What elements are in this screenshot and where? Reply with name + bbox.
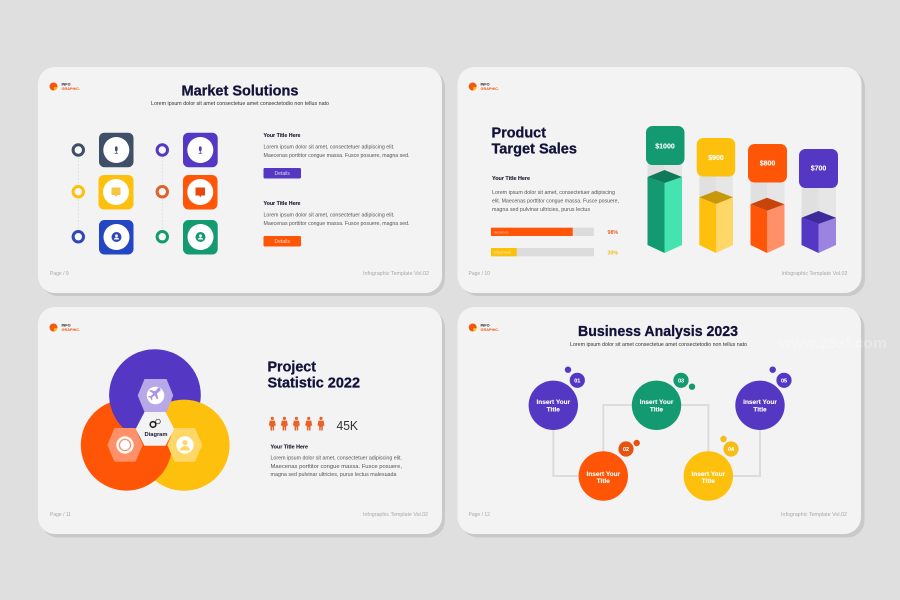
node 03: Insert Your <box>640 399 674 406</box>
subtitle: Lorem ipsum dolor sit amet consectetue amet consectetodio non tellus nato <box>570 342 747 348</box>
bar: 700: $700 <box>811 166 826 173</box>
node 03 <box>632 373 695 430</box>
hexagon: user icon <box>167 428 202 462</box>
footer: Page / 10 <box>468 271 490 277</box>
icon tile: green user <box>183 220 218 254</box>
node 02: 02 <box>623 447 629 453</box>
logo: GRAPHIC. <box>480 328 499 332</box>
bar: 700 <box>799 149 838 253</box>
node 02 <box>579 440 640 501</box>
logo <box>50 324 80 332</box>
icon tile: yellow message <box>98 175 134 210</box>
heading: Product <box>492 124 546 141</box>
people icons <box>269 417 324 430</box>
panel: market solutions <box>38 67 445 296</box>
icon tile: purple microphone <box>183 133 218 167</box>
node 02: Title <box>597 478 610 485</box>
node 04 <box>684 436 739 501</box>
node 03: 03 <box>678 378 684 384</box>
footer: Infographic Template Vol.02 <box>781 512 847 518</box>
text block one <box>264 133 410 159</box>
bar: 1000 <box>646 126 684 253</box>
button: details orange: Details <box>275 239 290 245</box>
footer: Page / 11 <box>50 512 71 518</box>
footer <box>50 512 428 518</box>
button: details purple <box>264 168 301 178</box>
logo: INFO <box>480 82 490 86</box>
logo: INFO <box>480 324 490 328</box>
logo <box>469 324 499 332</box>
heading: Market Solutions <box>182 82 298 100</box>
panel: product target sales <box>458 67 865 296</box>
hexagon: diagram center <box>136 412 174 446</box>
node 05: Insert Your <box>743 399 777 406</box>
text block: magna sed pulvinar ultricies, purus lectus malesuada <box>270 472 397 478</box>
button: details orange <box>264 236 301 246</box>
footer <box>50 271 429 277</box>
hexagon: chat icon <box>107 428 143 462</box>
heading <box>268 359 360 392</box>
text block one: Your Title Here <box>264 133 300 139</box>
logo: GRAPHIC. <box>62 87 80 91</box>
text block one: Maecenas porttitor congue massa. Fusce posuere, magna sed. <box>264 153 410 159</box>
text block two: Lorem ipsum dolor sit amet, consectetuer adipiscing elit. <box>264 213 394 219</box>
footer: Page / 12 <box>468 512 490 518</box>
footer: Infographic Template Vol.02 <box>363 512 428 518</box>
footer: Infographic Template Vol.02 <box>363 271 429 277</box>
node 05 <box>735 366 792 430</box>
subtitle: Lorem ipsum dolor sit amet consectetue amet consectetodio non tellus nato <box>151 101 329 107</box>
bar: 900 <box>697 138 735 253</box>
logo: INFO <box>62 82 71 86</box>
heading: Project <box>268 359 316 376</box>
icon tile: slate microphone <box>99 133 134 167</box>
node 05: 05 <box>781 378 787 384</box>
node 04: Title <box>702 478 715 485</box>
bar: 900: $900 <box>708 155 724 162</box>
icon tile: blue user <box>99 220 134 254</box>
text block two: Maecenas porttitor congue massa. Fusce posuere, magna sed. <box>264 221 410 227</box>
text block one: Lorem ipsum dolor sit amet, consectetuer adipiscing elit. <box>264 145 394 151</box>
bar: 800 <box>748 144 787 253</box>
node 05: Title <box>753 406 767 413</box>
connector lines <box>553 405 760 476</box>
node 01: Title <box>547 406 560 413</box>
timeline rings <box>73 145 168 242</box>
logo: INFO <box>62 324 71 328</box>
text block: Your Title Here <box>492 176 530 182</box>
node 01: 01 <box>574 378 580 384</box>
footer <box>468 271 848 277</box>
venn diagram <box>81 349 230 491</box>
text block: Lorem ipsum dolor sit amet, consectetuer adipiscing <box>492 190 615 196</box>
hexagon: diagram center: Diagram <box>144 432 168 438</box>
node 04: Insert Your <box>691 471 726 478</box>
logo <box>50 82 80 91</box>
panel: project statistic <box>38 307 445 538</box>
footer: Infographic Template Vol.02 <box>782 271 848 277</box>
watermark: www.25xl.com <box>778 335 887 352</box>
hexagon: plane icon <box>138 379 173 412</box>
heading: Business Analysis 2023 <box>578 323 738 340</box>
logo <box>469 82 499 91</box>
node 03: Title <box>650 406 664 413</box>
text block <box>270 445 402 478</box>
logo: GRAPHIC. <box>480 87 499 91</box>
heading: Target Sales <box>492 140 577 157</box>
text block <box>492 176 619 213</box>
progress bar: incomes: 98% <box>608 230 618 236</box>
progress bar: incomes: Incomes <box>494 230 508 234</box>
heading <box>492 124 577 157</box>
progress bar: expenses <box>491 248 618 256</box>
stat: 45K: 45K <box>336 419 359 433</box>
footer <box>468 512 847 518</box>
progress bar: expenses: Expenses <box>494 251 511 255</box>
footer: Page / 9 <box>50 271 69 277</box>
bar: 800: $800 <box>760 161 775 168</box>
bar: 1000: $1000 <box>655 144 675 150</box>
text block: elit. Maecenas porttitor congue massa. Fusce posuere, <box>492 198 619 204</box>
text block two <box>264 201 410 227</box>
icon tile: orange presentation <box>183 175 218 210</box>
panel: business analysis <box>458 307 864 538</box>
node 01: Insert Your <box>536 399 571 406</box>
text block: magna sed pulvinar ultricies, purus lectus <box>492 207 591 213</box>
heading: Statistic 2022 <box>268 375 360 392</box>
text block: Lorem ipsum dolor sit amet, consectetuer adipiscing elit. <box>270 456 402 462</box>
progress bar: expenses: 30% <box>608 250 618 256</box>
text block: Your Title Here <box>270 445 308 451</box>
node 02: Insert Your <box>586 471 621 478</box>
logo: GRAPHIC. <box>62 328 80 332</box>
node 04: 04 <box>728 447 735 453</box>
node 01 <box>529 366 585 430</box>
text block: Maecenas porttitor congue massa. Fusce posuere, <box>270 464 402 470</box>
progress bar: incomes <box>491 228 618 236</box>
button: details purple: Details <box>275 171 290 177</box>
text block two: Your Title Here <box>264 201 300 207</box>
